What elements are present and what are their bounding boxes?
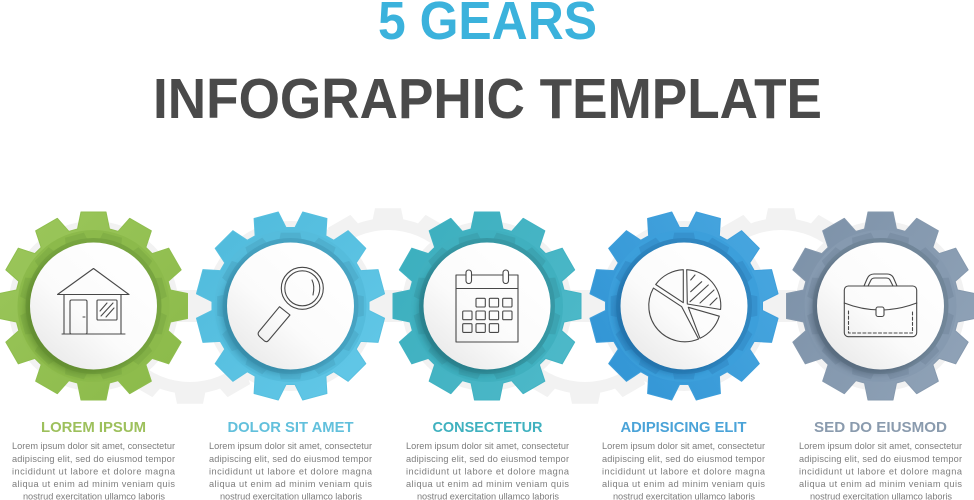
text column 3: aliqua ut enim ad minim veniam quis <box>406 479 569 489</box>
icon: pie chart <box>649 270 721 342</box>
text column 4 <box>602 419 766 500</box>
background gray half gears <box>8 208 966 404</box>
text column 2: adipiscing elit, sed do eiusmod tempor <box>209 454 372 464</box>
text column 4: aliqua ut enim ad minim veniam quis <box>602 479 765 489</box>
text column 2: aliqua ut enim ad minim veniam quis <box>209 479 372 489</box>
text column 4: incididunt ut labore et dolore magna <box>602 466 766 476</box>
icon: briefcase <box>844 274 917 337</box>
text column 4: ADIPISICING ELIT <box>620 419 746 436</box>
text column 2: incididunt ut labore et dolore magna <box>209 466 373 476</box>
text column 5: adipiscing elit, sed do eiusmod tempor <box>799 454 962 464</box>
text column 1: adipiscing elit, sed do eiusmod tempor <box>12 454 175 464</box>
text column 3 <box>406 419 570 500</box>
text column 2: Lorem ipsum dolor sit amet, consectetur <box>209 441 372 451</box>
text column 1: Lorem ipsum dolor sit amet, consectetur <box>12 441 175 451</box>
text column 5 <box>799 419 963 500</box>
title: INFOGRAPHIC TEMPLATE: INFOGRAPHIC TEMPLATE <box>153 67 822 131</box>
text column 1: LOREM IPSUM <box>41 419 146 436</box>
text column 3: incididunt ut labore et dolore magna <box>406 466 570 476</box>
icon: magnifier <box>258 267 323 342</box>
text column 1: aliqua ut enim ad minim veniam quis <box>12 479 175 489</box>
text column 5: aliqua ut enim ad minim veniam quis <box>799 479 962 489</box>
text column 1: incididunt ut labore et dolore magna <box>12 466 176 476</box>
text column 2 <box>209 419 373 500</box>
gear 4: blue with pie chart icon <box>569 191 799 421</box>
text column 2: DOLOR SIT AMET <box>228 419 354 436</box>
gear 5: slate gray with briefcase icon <box>786 212 974 400</box>
text column 3: Lorem ipsum dolor sit amet, consectetur <box>406 441 569 451</box>
text column 4: Lorem ipsum dolor sit amet, consectetur <box>602 441 765 451</box>
text column 5: SED DO EIUSMOD <box>814 419 947 436</box>
gear 3: teal with calendar icon <box>393 212 581 400</box>
gear 1: green with house icon <box>0 212 188 400</box>
text column 5: Lorem ipsum dolor sit amet, consectetur <box>799 441 962 451</box>
text column 1 <box>12 419 176 500</box>
icon: calendar <box>456 270 518 342</box>
text column 4: adipiscing elit, sed do eiusmod tempor <box>602 454 765 464</box>
icon: house <box>58 268 129 334</box>
text column 3: adipiscing elit, sed do eiusmod tempor <box>406 454 569 464</box>
text column 5: incididunt ut labore et dolore magna <box>799 466 963 476</box>
text column 3: CONSECTETUR <box>432 419 543 436</box>
gear 2: light blue with magnifier icon <box>175 191 406 421</box>
